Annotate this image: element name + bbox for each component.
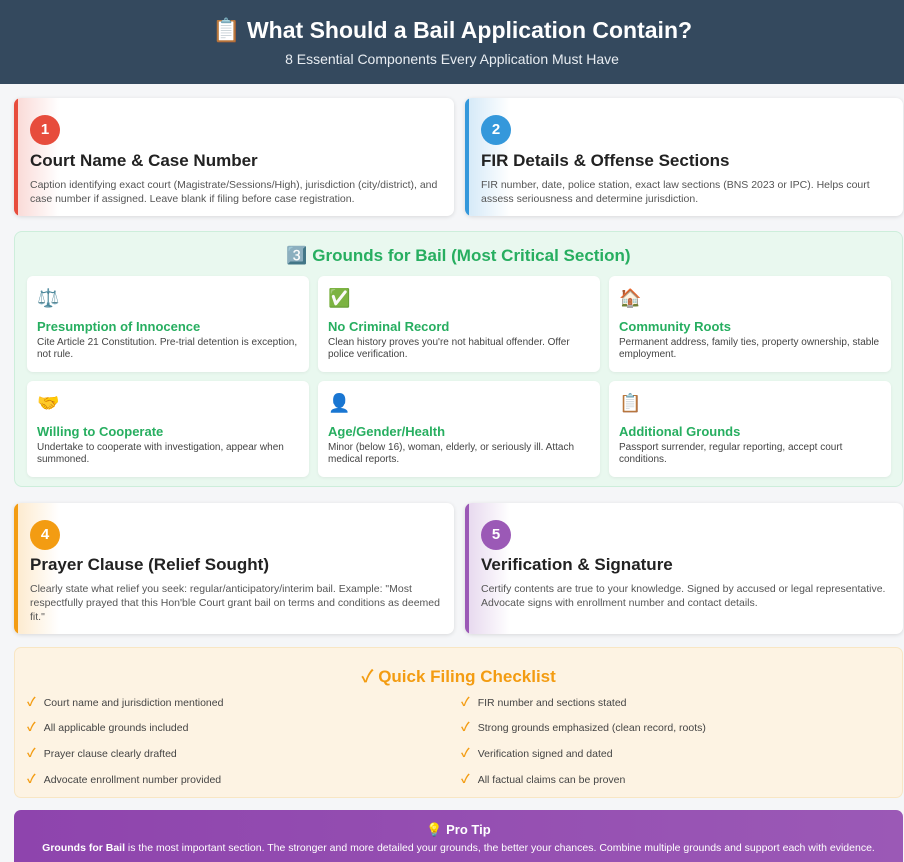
heading: Court Name & Case Number [30,151,258,170]
ground: no record: No Criminal Record [328,319,449,334]
description: Caption identifying exact court (Magistrate/Sessions/High), jurisdiction (city/district), and case number if assigned. Leave blank if filing before case registration. [30,179,437,205]
callout: pro tip [14,810,903,862]
ground: additional: 📋 [619,393,641,413]
heading: Verification & Signature [481,555,673,574]
badge 2 [481,115,511,145]
description: FIR number, date, police station, exact law sections (BNS 2023 or IPC). Helps court assess seriousness and determine jurisdiction. [481,179,870,205]
card 1: court name [14,98,454,216]
ground: community: Community Roots [619,319,731,334]
checklist items [27,695,706,786]
header [0,0,904,84]
heading: Prayer Clause (Relief Sought) [30,555,269,574]
ground: presumption: Presumption of Innocence [37,319,200,334]
ground: community [609,276,891,372]
panel: grounds for bail [14,231,903,487]
checklist items: ✓ All factual claims can be proven [461,772,625,786]
ground: presumption [27,276,309,372]
badge 4: 4 [41,526,49,543]
pro tip text: Grounds for Bail is the most important section. The stronger and more detailed your grounds, the better your chances. Combine multiple grounds and support each with evidence. [42,842,875,854]
ground: age [318,381,600,477]
badge 5: 5 [492,526,500,543]
ground: age: 👤 [328,393,350,413]
checklist items: ✓ Verification signed and dated [461,746,613,760]
checklist items: ✓ Prayer clause clearly drafted [27,746,177,760]
subtitle: 8 Essential Components Every Application Must Have [285,51,619,67]
grounds heading: 3️⃣ Grounds for Bail (Most Critical Section) [286,246,631,265]
checklist items: ✓ Advocate enrollment number provided [27,772,221,786]
ground: cooperate [27,381,309,477]
description: Certify contents are true to your knowledge. Signed by accused or legal representative. Advocate signs with enrollment number and contact details. [481,583,885,609]
panel: checklist [14,647,903,798]
ground: cooperate: 🤝 [37,393,59,413]
badge 5 [481,520,511,550]
ground: cooperate: Undertake to cooperate with investigation, appear when summoned. [37,442,284,465]
badge 1 [30,115,60,145]
checklist items: ✓ All applicable grounds included [27,720,188,734]
ground: presumption: Cite Article 21 Constitution. Pre-trial detention is exception, not rule. [37,337,297,360]
pro tip heading: 💡 Pro Tip [426,822,491,837]
checklist items: ✓ FIR number and sections stated [461,695,627,709]
checklist items: ✓ Court name and jurisdiction mentioned [27,695,223,709]
card 2: FIR [465,98,903,216]
checklist heading: ✓ Quick Filing Checklist [361,667,556,686]
card 5: verification [465,503,903,634]
ground: no record [318,276,600,372]
checklist items: ✓ Strong grounds emphasized (clean record, roots) [461,720,706,734]
ground: community: Permanent address, family ties, property ownership, stable employment. [619,337,879,360]
ground: age: Age/Gender/Health [328,424,445,439]
badge 1: 1 [41,121,49,138]
card 4: prayer [14,503,454,634]
ground: age: Minor (below 16), woman, elderly, or seriously ill. Attach medical reports. [328,442,574,465]
heading: FIR Details & Offense Sections [481,151,729,170]
description: Clearly state what relief you seek: regular/anticipatory/interim bail. Example: "Most respectfully prayed that this Hon'ble Court grant bail on terms and conditions as deemed fit." [30,583,440,623]
badge 4 [30,520,60,550]
ground: no record: Clean history proves you're not habitual offender. Offer police verification. [328,337,570,360]
ground: community: 🏠 [619,288,641,308]
ground: presumption: ⚖️ [37,288,59,308]
ground: additional: Passport surrender, regular reporting, accept court conditions. [619,442,842,465]
ground: cooperate: Willing to Cooperate [37,424,163,439]
title: 📋 What Should a Bail Application Contain? [212,17,692,43]
badge 2: 2 [492,121,500,138]
ground: additional: Additional Grounds [619,424,740,439]
ground: additional [609,381,891,477]
ground: no record: ✅ [328,288,350,308]
